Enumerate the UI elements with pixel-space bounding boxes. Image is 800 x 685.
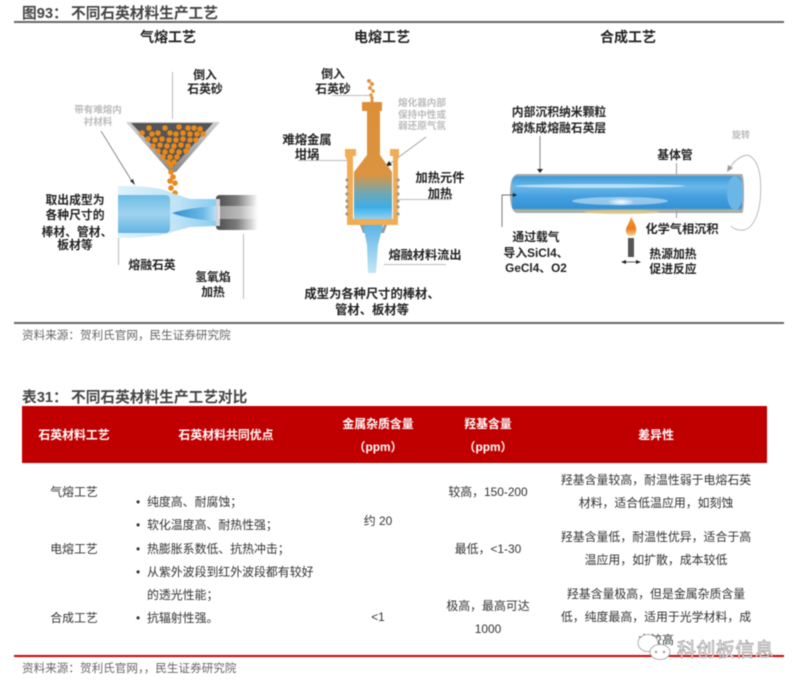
figure title: 不同石英材料生产工艺 <box>71 4 218 22</box>
label: inner deposition: 内部沉积纳米颗粒 <box>512 105 606 119</box>
label: refractory metal crucible <box>282 132 332 162</box>
label: inner deposition: 熔炼成熔融石英层 <box>512 121 606 135</box>
label: refractory metal crucible: 难熔金属 <box>282 132 332 147</box>
label: pour quartz sand: 倒入 <box>193 68 217 82</box>
watermark <box>638 634 774 661</box>
heading: electric fusion: 电熔工艺 <box>354 29 410 45</box>
label: shaped products <box>304 286 440 317</box>
label: rotation: 旋转 <box>732 129 750 140</box>
icon: crucible <box>345 102 400 273</box>
arrow: atmosphere pointer <box>385 137 426 167</box>
column: shared advantages: 纯度高、耐腐蚀； <box>147 495 242 509</box>
label: heat source: 热源加热 <box>649 247 697 261</box>
label: shaped products: 各种尺寸的 <box>46 208 105 222</box>
label: inner deposition <box>512 105 606 135</box>
column: shared advantages: • <box>136 518 140 532</box>
label: neutral or weakly reducing atmosphere: 弱还原气氛 <box>398 120 446 132</box>
table header: 羟基含量 <box>464 417 512 431</box>
source note: table: 资料来源：贺利氏官网，，民生证券研究院 <box>22 661 237 675</box>
label: pour quartz sand <box>187 68 223 96</box>
label: pour quartz sand <box>315 67 351 96</box>
panel: flame fusion process <box>42 29 258 299</box>
label: shaped products: 棒材、管材、 <box>42 225 112 239</box>
column: metal impurities <box>364 514 393 624</box>
heading: synthesis: 合成工艺 <box>600 29 656 45</box>
icon: quartz tube <box>510 174 744 214</box>
column: process names: 电熔工艺 <box>50 542 98 556</box>
table header: 金属杂质含量 <box>342 417 414 431</box>
label: oxyhydrogen flame heating: 氢氧焰 <box>195 270 231 284</box>
arrow: carrier gas inlet <box>502 193 517 227</box>
label: refractory lining: 带有难熔内 <box>74 104 122 116</box>
column: shared advantages: 的透光性能； <box>147 588 218 602</box>
table title: 表31： <box>22 390 68 406</box>
label: neutral or weakly reducing atmosphere: 保持中性或 <box>398 109 446 121</box>
watermark: 科创板信息 <box>677 639 774 661</box>
panel: electric fusion process <box>282 29 465 317</box>
label: shaped products: 取出成型为 <box>46 193 104 207</box>
label: pour quartz sand: 石英砂 <box>187 82 223 96</box>
column: shared advantages: • <box>136 565 140 579</box>
label: molten material outflow: 熔融材料流出 <box>388 247 462 262</box>
column: hydroxyl content: 1000 <box>475 622 502 636</box>
arrow: lining pointer <box>101 131 135 185</box>
column: hydroxyl content: 最低，<1-30 <box>455 542 522 556</box>
label: pour quartz sand: 石英砂 <box>315 82 351 96</box>
column: shared advantages: 软化温度高、耐热性强； <box>147 518 278 532</box>
table header: 差异性 <box>638 428 674 442</box>
label: fused quartz: 熔融石英 <box>128 258 176 272</box>
column: differences: 材料，适合低温应用，如刻蚀 <box>579 496 733 510</box>
label: neutral or weakly reducing atmosphere <box>398 97 446 132</box>
label: neutral or weakly reducing atmosphere: 熔化器内部 <box>398 97 446 109</box>
column: shared advantages: • <box>136 611 140 625</box>
column: differences: 羟基含量较高，耐温性弱于电熔石英 <box>561 473 751 487</box>
column: hydroxyl content: 极高，最高可达 <box>446 599 530 613</box>
source note: figure: 资料来源：贺利氏官网，民生证券研究院 <box>22 328 231 342</box>
icon: chat bubbles <box>638 634 670 660</box>
label: heating element: 加热 <box>428 186 453 201</box>
label: substrate tube: 基体管 <box>657 148 693 162</box>
column: hydroxyl content: 较高，150-200 <box>448 485 528 499</box>
column: hydroxyl content <box>446 485 530 636</box>
column: shared advantages: 从紫外波段到红外波段都有较好 <box>147 565 314 579</box>
table header <box>22 406 767 463</box>
label: heating element <box>415 170 465 201</box>
label: CVD: 化学气相沉积 <box>645 221 719 236</box>
column: differences <box>561 473 751 647</box>
table header: （ppm） <box>354 440 402 454</box>
label: heat source: 促进反应 <box>649 262 697 276</box>
label: refractory metal crucible: 坩埚 <box>295 147 319 162</box>
arrow: deposition pointer <box>537 136 543 173</box>
column: shared advantages: • <box>136 542 140 556</box>
label: heating element: 加热元件 <box>415 170 465 185</box>
table: comparison <box>22 406 767 647</box>
label: carrier gas: 通过载气 <box>512 230 560 244</box>
icon: falling sand <box>367 79 375 103</box>
label: shaped products <box>42 193 112 252</box>
table header: 石英材料工艺 <box>38 428 110 442</box>
column: differences: 羟基含量极高，但是金属杂质含量 <box>567 587 745 601</box>
label: shaped products: 板材等 <box>57 238 93 252</box>
column: shared advantages: 抗辐射性强。 <box>147 611 218 625</box>
table header: 石英材料共同优点 <box>178 428 274 442</box>
label: oxyhydrogen flame heating <box>195 270 231 299</box>
arrow: torch traverse <box>621 260 641 264</box>
label: oxyhydrogen flame heating: 加热 <box>201 285 225 299</box>
label: refractory lining: 衬材料 <box>84 116 113 128</box>
icon: funnel with sand <box>126 122 220 201</box>
label: pour quartz sand: 倒入 <box>321 67 345 81</box>
icon: molten quartz ingot and burner flame <box>118 186 258 238</box>
column: shared advantages: 热膨胀系数低、抗热冲击； <box>147 542 290 556</box>
table title: 不同石英材料生产工艺对比 <box>71 388 248 406</box>
column: differences: 温应用，如扩散，成本较低 <box>585 553 727 567</box>
column: process names: 合成工艺 <box>50 611 98 625</box>
panel: synthetic process <box>502 29 761 276</box>
label: refractory lining <box>74 104 122 128</box>
icon: flame and torch <box>626 217 636 257</box>
label: shaped products: 管材、板材等 <box>335 302 409 317</box>
table header: （ppm） <box>464 440 512 454</box>
label: shaped products: 成型为各种尺寸的棒材、 <box>304 286 440 301</box>
label: heat source <box>649 247 697 276</box>
column: shared advantages: • <box>136 495 140 509</box>
label: carrier gas <box>504 230 568 275</box>
label: carrier gas: GeCl4、O2 <box>505 261 567 275</box>
heading: flame fusion: 气熔工艺 <box>140 29 196 45</box>
column: differences: 本较高 <box>638 633 674 647</box>
column: metal impurities: <1 <box>371 610 385 624</box>
label: carrier gas: 导入SiCl4、 <box>504 246 568 260</box>
arrow: rotation <box>727 155 761 230</box>
figure title: 图93： <box>22 6 68 22</box>
column: process names: 气熔工艺 <box>50 485 98 499</box>
column: process names <box>50 485 98 625</box>
column: differences: 低，纯度最高，适用于光学材料，成 <box>561 610 751 624</box>
column: differences: 羟基含量低，耐温性优异，适合于高 <box>561 530 751 544</box>
column: metal impurities: 约 20 <box>364 514 393 528</box>
column: shared advantages <box>136 495 314 625</box>
